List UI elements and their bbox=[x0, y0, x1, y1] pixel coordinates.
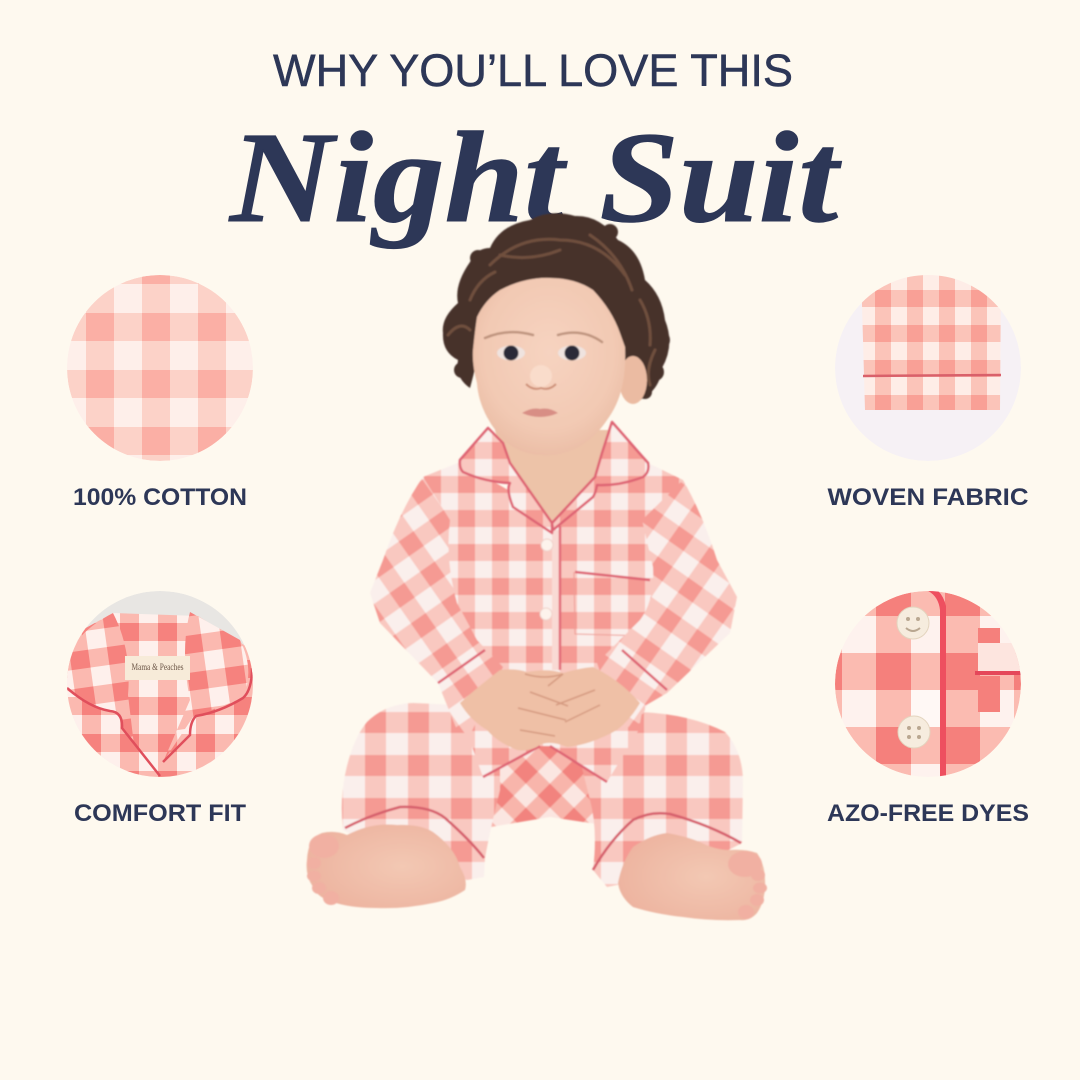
panel: woven fabric bbox=[828, 270, 1028, 511]
shirt buttons bbox=[540, 539, 553, 620]
right foot bbox=[618, 833, 767, 920]
panel: comfort fit bbox=[64, 591, 256, 827]
placket bbox=[552, 530, 560, 670]
eyebrows bbox=[485, 332, 602, 342]
illustration: seated child in gingham night suit bbox=[307, 213, 767, 920]
left sleeve bbox=[370, 477, 503, 735]
label: azo-free dyes: AZO-FREE DYES bbox=[827, 800, 1029, 827]
swatch: cotton fabric bbox=[67, 275, 253, 461]
hands bbox=[460, 667, 640, 750]
pocket bbox=[574, 550, 655, 636]
eyes bbox=[497, 346, 586, 360]
swatch: buttons and placket bbox=[835, 586, 1028, 778]
right sleeve bbox=[597, 480, 737, 730]
panel: azo-free dyes bbox=[827, 586, 1029, 827]
shirt body bbox=[423, 462, 683, 720]
heading: why you'll love this: WHY YOU’LL LOVE THIS bbox=[273, 45, 793, 96]
left collar bbox=[460, 428, 552, 533]
hair bbox=[443, 213, 670, 400]
crotch fabric bbox=[470, 740, 620, 828]
right collar bbox=[552, 422, 648, 530]
neck bbox=[495, 430, 610, 530]
label: 100% cotton: 100% COTTON bbox=[73, 484, 247, 511]
label: woven fabric: WOVEN FABRIC bbox=[828, 484, 1028, 511]
panel: 100% cotton bbox=[67, 275, 253, 511]
swatch: sleeve cuff bbox=[862, 275, 1001, 410]
face bbox=[473, 278, 625, 455]
swatch: collar with tag: Mama & Peaches bbox=[132, 663, 184, 673]
left foot bbox=[307, 824, 466, 908]
label: comfort fit: COMFORT FIT bbox=[74, 800, 246, 827]
shirt hem bbox=[457, 705, 643, 782]
title: night suit: Night Suit bbox=[228, 106, 842, 250]
nose bbox=[526, 365, 556, 389]
right pant leg bbox=[580, 712, 743, 887]
swatch: collar with tag bbox=[64, 591, 256, 780]
left pant leg bbox=[342, 703, 500, 880]
right ear bbox=[619, 356, 647, 404]
mouth bbox=[522, 408, 558, 417]
neck v bbox=[505, 440, 600, 523]
